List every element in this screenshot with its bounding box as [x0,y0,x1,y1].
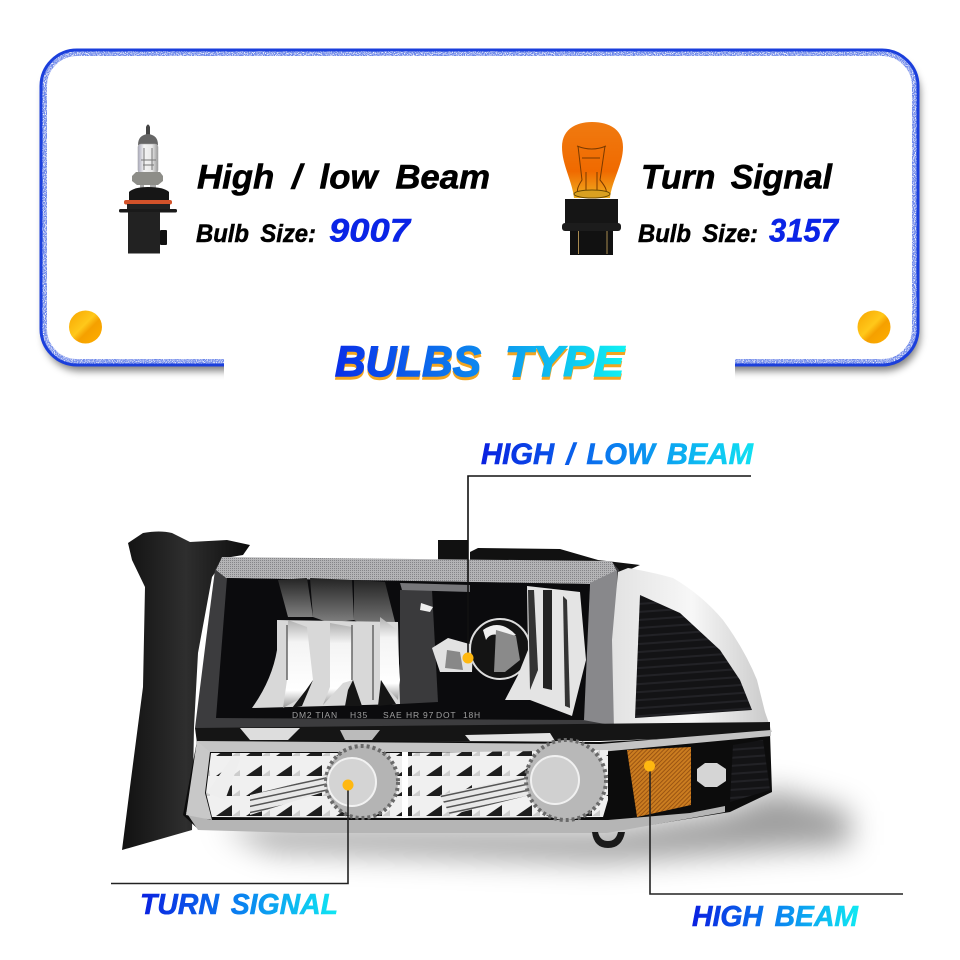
projector: left [328,758,376,806]
bumper bottom chrome [186,806,725,833]
text: bulb size 9007: 9007 [329,212,413,248]
chrome ring: left [326,746,398,818]
title: bulbs type: TYPE [505,338,625,386]
headlamp frame [195,558,619,728]
callout: turn signal leader [111,790,348,884]
mounting hole [697,763,726,787]
ray reflections [207,752,530,818]
icon: right corner dot [858,310,890,344]
icon: 3157 amber bulb [562,122,623,255]
label: high low beam: HIGH / LOW BEAM [481,438,754,471]
callout dot: high low beam [462,652,474,664]
callout dot: turn signal [342,780,354,790]
text: bulb size 3157: Bulb Size: [638,220,758,248]
title: bulbs type: BULBS [335,338,481,386]
projector: right [531,756,579,804]
gap between lamps [195,722,770,743]
reflector strips [252,578,586,716]
bumper top chrome [197,730,771,752]
rubber gasket [122,532,250,850]
rear bracket [438,540,468,562]
callout: high beam leader [650,770,903,894]
rear housing [470,548,640,575]
lens markings: DM2 TIAN [292,710,338,720]
bumper lamp body [183,733,772,832]
text: high low beam heading: High / low Beam [197,158,490,196]
chrome ring: right [526,740,606,820]
bumper left chrome [186,741,212,820]
icon: left corner dot [69,310,102,344]
headlamp right trim [583,570,617,726]
label: turn signal: TURN SIGNAL [140,889,338,921]
text: bulb size 9007: Bulb Size: [196,220,316,248]
panel: bulb types card [41,50,920,388]
bumper clear lens [206,750,608,818]
headlamp top trim [216,557,617,584]
headlight shadow [220,790,850,862]
lens markings: DOT [436,710,456,720]
headlamp lens interior [216,578,590,720]
text: bulb size 3157: 3157 [769,212,840,248]
label: high beam: HIGH BEAM [692,901,859,933]
lens markings: H35 [350,710,368,720]
amber signal lens [627,747,691,817]
text: turn signal heading: Turn Signal [641,158,834,196]
title: bulbs type [335,338,625,386]
corner lamp [612,568,772,732]
corner lamp lens [635,595,752,718]
bumper right lines [730,740,770,802]
callout dot: high beam [644,760,655,772]
mount tab [592,832,625,848]
icon: 9007 halogen bulb [119,124,177,254]
illustration: headlight assembly [122,532,772,850]
lens markings [292,710,481,720]
text: bulb size 9007 [196,212,413,248]
lens markings: SAE [383,710,402,720]
lens markings: HR 97 [406,710,434,720]
text: bulb size 3157 [638,212,840,248]
callout: high low beam leader [468,476,751,658]
lens markings: 18H [463,710,481,720]
